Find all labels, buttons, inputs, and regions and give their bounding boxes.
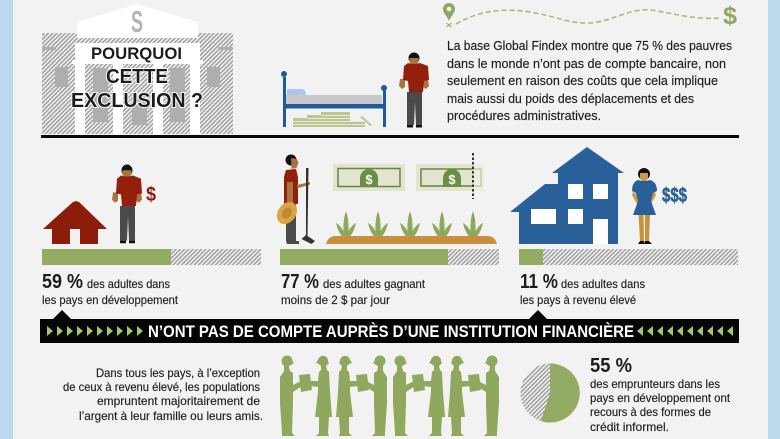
progress bar: 59 % <box>42 249 261 265</box>
icon: dollar sign: $ <box>723 2 737 30</box>
stat: 59 %: des adultes dans <box>87 277 170 291</box>
icon: banknote: $ <box>365 172 373 187</box>
figure: woman <box>632 168 657 244</box>
stat: 77 %: 77 % <box>281 271 319 293</box>
intro text: mais aussi du poids des déplacements et des <box>447 91 694 106</box>
intro text: La base Global Findex montre que 75 % des pauvres <box>447 38 732 53</box>
stat: 11 %: les pays à revenu élevé <box>520 293 636 307</box>
title: EXCLUSION ? <box>71 90 203 112</box>
stat: 55 % informal credit <box>590 355 731 434</box>
icon: banknote crossed by poverty line: $ <box>448 172 456 187</box>
text: family borrowing: empruntent majoritairement de <box>97 394 260 408</box>
intro text: procédures administratives. <box>447 108 601 123</box>
intro text: dans le monde n’ont pas de compte bancaire, non <box>447 56 726 71</box>
illustration: bank building <box>42 4 233 134</box>
figure: man beside bed <box>399 52 429 128</box>
title: CETTE <box>106 66 168 88</box>
intro text <box>447 38 732 123</box>
banner: N’ONT PAS DE COMPTE AUPRÈS D’UNE INSTITUTION FINANCIÈRE <box>148 322 634 341</box>
stat: 59 %: les pays en développement <box>42 293 179 307</box>
title <box>71 44 203 112</box>
illustration: bed with money hidden underneath <box>281 71 387 127</box>
stat: 59 %: 59 % <box>42 271 83 293</box>
text: family borrowing <box>63 366 263 423</box>
illustration: crops on soil <box>326 211 497 244</box>
icon: red house <box>43 201 107 244</box>
stat: 11 % <box>520 271 645 307</box>
stat: 55 % informal credit: crédit informel. <box>590 420 669 434</box>
dashed route <box>456 10 722 24</box>
icon: map pin <box>443 3 455 27</box>
text: family borrowing: de ceux à revenu élevé, les populations <box>63 380 260 394</box>
intro text: seulement en raison des coûts que cela implique <box>447 73 718 88</box>
icon: red dollar: $ <box>146 184 156 206</box>
stat: 55 % informal credit: recours à des formes de <box>590 405 711 419</box>
figure: farmer with hoe and hat <box>273 154 315 244</box>
progress bar: 11 % <box>519 249 738 265</box>
stat: 11 %: 11 % <box>520 271 558 293</box>
figure: man with one dollar <box>112 165 142 243</box>
text: family borrowing: l’argent à leur famille ou leurs amis. <box>79 409 263 423</box>
icon: three dollars: $$$ <box>662 185 687 207</box>
stat: 77 % <box>281 271 426 307</box>
stat: 55 % informal credit: 55 % <box>590 355 632 377</box>
illustration: bank building: S <box>131 4 143 39</box>
text: family borrowing: Dans tous les pays, à l’exception <box>96 366 260 380</box>
stat: 11 %: des adultes dans <box>561 277 645 291</box>
progress bar: 77 % <box>280 249 499 265</box>
banner <box>40 310 739 343</box>
illustration: people exchanging money <box>280 356 499 436</box>
icon: banknote crossed by poverty line <box>416 153 484 199</box>
stat: 55 % informal credit: des emprunteurs dans les <box>590 377 720 391</box>
stat: 77 %: des adultes gagnant <box>323 277 426 291</box>
pie chart: 55 % <box>520 363 580 422</box>
stat: 59 % <box>42 271 179 307</box>
stat: 77 %: moins de 2 $ par jour <box>281 293 390 307</box>
icon: blue house <box>510 147 624 244</box>
title: POURQUOI <box>91 44 182 63</box>
stat: 55 % informal credit: pays en développement ont <box>590 391 731 405</box>
icon: banknote <box>333 164 405 191</box>
